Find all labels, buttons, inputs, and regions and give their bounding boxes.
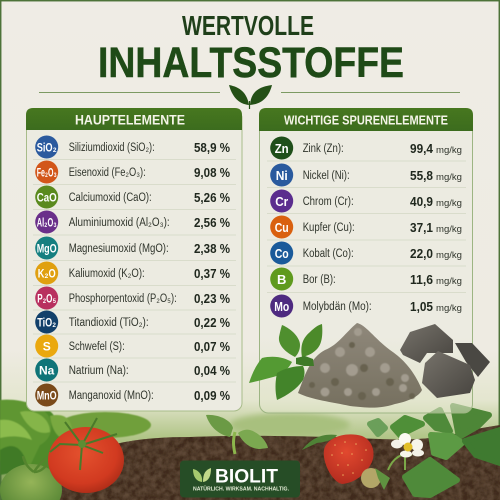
row: Co: Co — [275, 246, 289, 261]
row: Na: 0,04 % — [194, 363, 230, 378]
row: SiO2: SiO₂ — [37, 140, 57, 154]
row: Al2O3: Aluminiumoxid (Al₂O₃): — [69, 217, 170, 229]
panel: Hauptelemente — [26, 108, 242, 411]
row: Al2O3: Al₂O₃ — [37, 216, 57, 230]
row: Ni: mg/kg — [436, 172, 462, 183]
row: MnO: MnO — [37, 388, 57, 402]
tomato stem — [50, 418, 117, 470]
logo: BIOLIT — [180, 460, 300, 498]
icon: logo leaves — [193, 468, 211, 482]
row: Cr: mg/kg — [436, 198, 462, 209]
title: WERTVOLLE — [182, 10, 314, 41]
row: Zn: mg/kg — [436, 145, 462, 156]
row: Mo — [270, 294, 462, 318]
powder pile — [298, 323, 422, 408]
green tomato — [0, 464, 62, 500]
row: SiO2: Siliziumdioxid (SiO₂): — [69, 142, 155, 154]
row: CaO — [35, 186, 230, 208]
row: K2O: K₂O — [38, 266, 56, 280]
row: Cu: Kupfer (Cu): — [303, 222, 355, 234]
row: TiO2: Titandioxid (TiO₂): — [69, 317, 149, 329]
panel: Wichtige Spurenelemente — [259, 108, 473, 413]
row: CaO: 5,26 % — [194, 190, 230, 205]
row: CaO: CaO — [37, 190, 57, 204]
row: Co: mg/kg — [436, 250, 462, 261]
row: MgO: MgO — [37, 242, 57, 256]
row: Mo: mg/kg — [436, 303, 462, 314]
row: Fe2O3: Fe₂O₃ — [37, 166, 57, 180]
row: S — [35, 334, 230, 358]
row: MnO: 0,09 % — [194, 388, 230, 403]
row: Zn: Zn — [275, 141, 289, 156]
row: Ni: Ni — [276, 168, 288, 183]
row: Fe2O3: Eisenoxid (Fe₂O₃): — [69, 167, 146, 179]
panel header — [26, 108, 242, 130]
row: Na: Na — [39, 364, 55, 378]
scene: soil and vegetables — [0, 400, 500, 500]
row: TiO2: 0,22 % — [194, 315, 230, 330]
divider with leaf icon — [39, 85, 460, 109]
row: Zn: 99,4 — [410, 141, 434, 156]
row: Co — [270, 242, 462, 264]
row: Co: 22,0 — [410, 246, 433, 261]
row: Cu — [270, 216, 462, 238]
logo: BIOLIT: NATÜRLICH. WIRKSAM. NACHHALTIG. — [193, 486, 290, 492]
row: Al2O3: 2,56 % — [194, 215, 230, 230]
row: P2O5: P₂O₅ — [37, 292, 56, 306]
strawberry plant leaves — [302, 406, 500, 495]
row: B: 11,6 — [410, 272, 433, 287]
row: Na: Natrium (Na): — [69, 365, 129, 377]
row: Fe2O3: 9,08 % — [194, 165, 230, 180]
row: Na — [35, 358, 230, 382]
row: Mo: Molybdän (Mo): — [303, 301, 372, 313]
row: B: mg/kg — [436, 276, 462, 287]
row: MnO — [35, 384, 230, 406]
row: Cu: mg/kg — [436, 224, 462, 235]
row: Ni — [270, 164, 462, 186]
lettuce — [0, 400, 151, 478]
illustration: rock powder, rocks and leaves — [249, 323, 490, 408]
panel header: HAUPTELEMENTE — [75, 112, 185, 128]
row: SiO2 — [35, 136, 230, 158]
row: TiO2 — [35, 310, 230, 334]
row: Cu: Cu — [275, 220, 289, 235]
rocks — [400, 324, 490, 398]
row: MgO: Magnesiumoxid (MgO): — [69, 243, 169, 255]
row: Co: Kobalt (Co): — [303, 248, 354, 260]
panel body — [260, 110, 472, 413]
flower — [391, 433, 424, 458]
row: Mo: Mo — [274, 299, 289, 314]
logo: BIOLIT: BIOLIT — [215, 466, 278, 488]
row: Cr — [270, 190, 462, 212]
row: MgO — [35, 236, 230, 260]
row: K2O: 0,37 % — [194, 266, 230, 281]
row: CaO: Calciumoxid (CaO): — [69, 192, 152, 204]
row: K2O — [35, 262, 230, 284]
soil — [40, 425, 500, 500]
row: K2O: Kaliumoxid (K₂O): — [69, 268, 145, 280]
row: SiO2: 58,9 % — [194, 140, 230, 155]
title — [98, 10, 404, 87]
row: Mo: 1,05 — [410, 299, 433, 314]
panel body — [26, 110, 242, 411]
row: Cr: Chrom (Cr): — [303, 196, 354, 208]
row: TiO2: TiO₂ — [37, 316, 56, 330]
seedling — [234, 432, 235, 454]
title: INHALTSSTOFFE — [98, 39, 404, 87]
row: Cu: 37,1 — [410, 220, 433, 235]
row: Ni: 55,8 — [410, 168, 433, 183]
row: Cr: Cr — [275, 194, 288, 209]
row: P2O5: 0,23 % — [194, 291, 230, 306]
row: S: S — [43, 340, 51, 354]
small unripe strawberry — [361, 468, 390, 490]
row: Zn: Zink (Zn): — [303, 143, 344, 155]
row: P2O5 — [35, 286, 230, 310]
row: MnO: Manganoxid (MnO): — [69, 390, 154, 402]
row: Cr: 40,9 — [410, 194, 433, 209]
strawberry — [324, 434, 374, 484]
row: P2O5: Phosphorpentoxid (P₂O₅): — [69, 293, 177, 305]
row: Zn — [270, 136, 462, 160]
row: S: Schwefel (S): — [69, 341, 125, 353]
row: Ni: Nickel (Ni): — [303, 170, 350, 182]
row: Al2O3 — [35, 210, 230, 234]
row: MgO: 2,38 % — [194, 241, 230, 256]
leaves — [249, 324, 322, 400]
row: B — [270, 268, 462, 290]
panel header: WICHTIGE SPURENELEMENTE — [284, 112, 448, 128]
row: B: B — [277, 272, 286, 287]
row: S: 0,07 % — [194, 339, 230, 354]
red tomato — [48, 427, 124, 493]
row: Fe2O3 — [35, 160, 230, 184]
panel header — [259, 108, 473, 131]
row: B: Bor (B): — [303, 274, 336, 286]
